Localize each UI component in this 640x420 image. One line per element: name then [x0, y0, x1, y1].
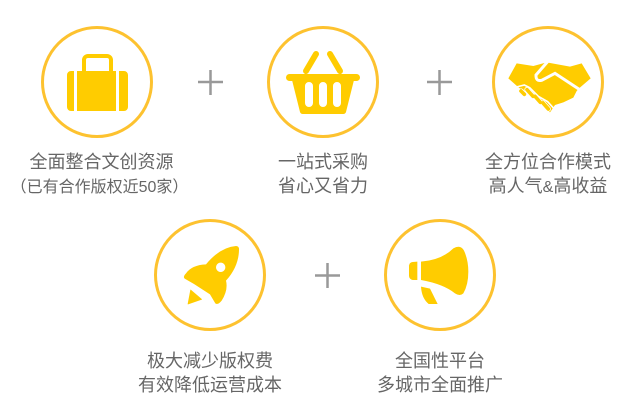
icon: rocket in circle [156, 220, 264, 330]
text: one-stop purchasing [278, 152, 368, 196]
icon: handshake in circle [494, 28, 602, 136]
plus sign 3 [315, 263, 340, 288]
text: nationwide platform: 多城市全面推广 [377, 375, 503, 395]
plus sign 2 [427, 70, 452, 95]
text: nationwide platform [377, 351, 503, 395]
text: total cultural resources [11, 152, 188, 196]
plus sign 1 [198, 70, 223, 95]
text: lower licensing fees: 极大减少版权费 [147, 351, 273, 371]
text: lower licensing fees: 有效降低运营成本 [138, 375, 282, 395]
icon: briefcase in circle [42, 28, 152, 136]
text: total cultural resources: （已有合作版权近50家） [11, 179, 188, 196]
icon: basket in circle [268, 28, 378, 136]
text: all-round cooperation [485, 152, 611, 196]
text: total cultural resources: 全面整合文创资源 [30, 152, 174, 172]
icon: megaphone in circle [386, 220, 494, 330]
text: one-stop purchasing: 一站式采购 [278, 152, 368, 172]
text: one-stop purchasing: 省心又省力 [278, 176, 368, 196]
text: nationwide platform: 全国性平台 [395, 351, 485, 371]
text: all-round cooperation: 全方位合作模式 [485, 152, 611, 172]
text: all-round cooperation: 高人气&高收益 [489, 176, 607, 196]
text: lower licensing fees [138, 351, 282, 395]
